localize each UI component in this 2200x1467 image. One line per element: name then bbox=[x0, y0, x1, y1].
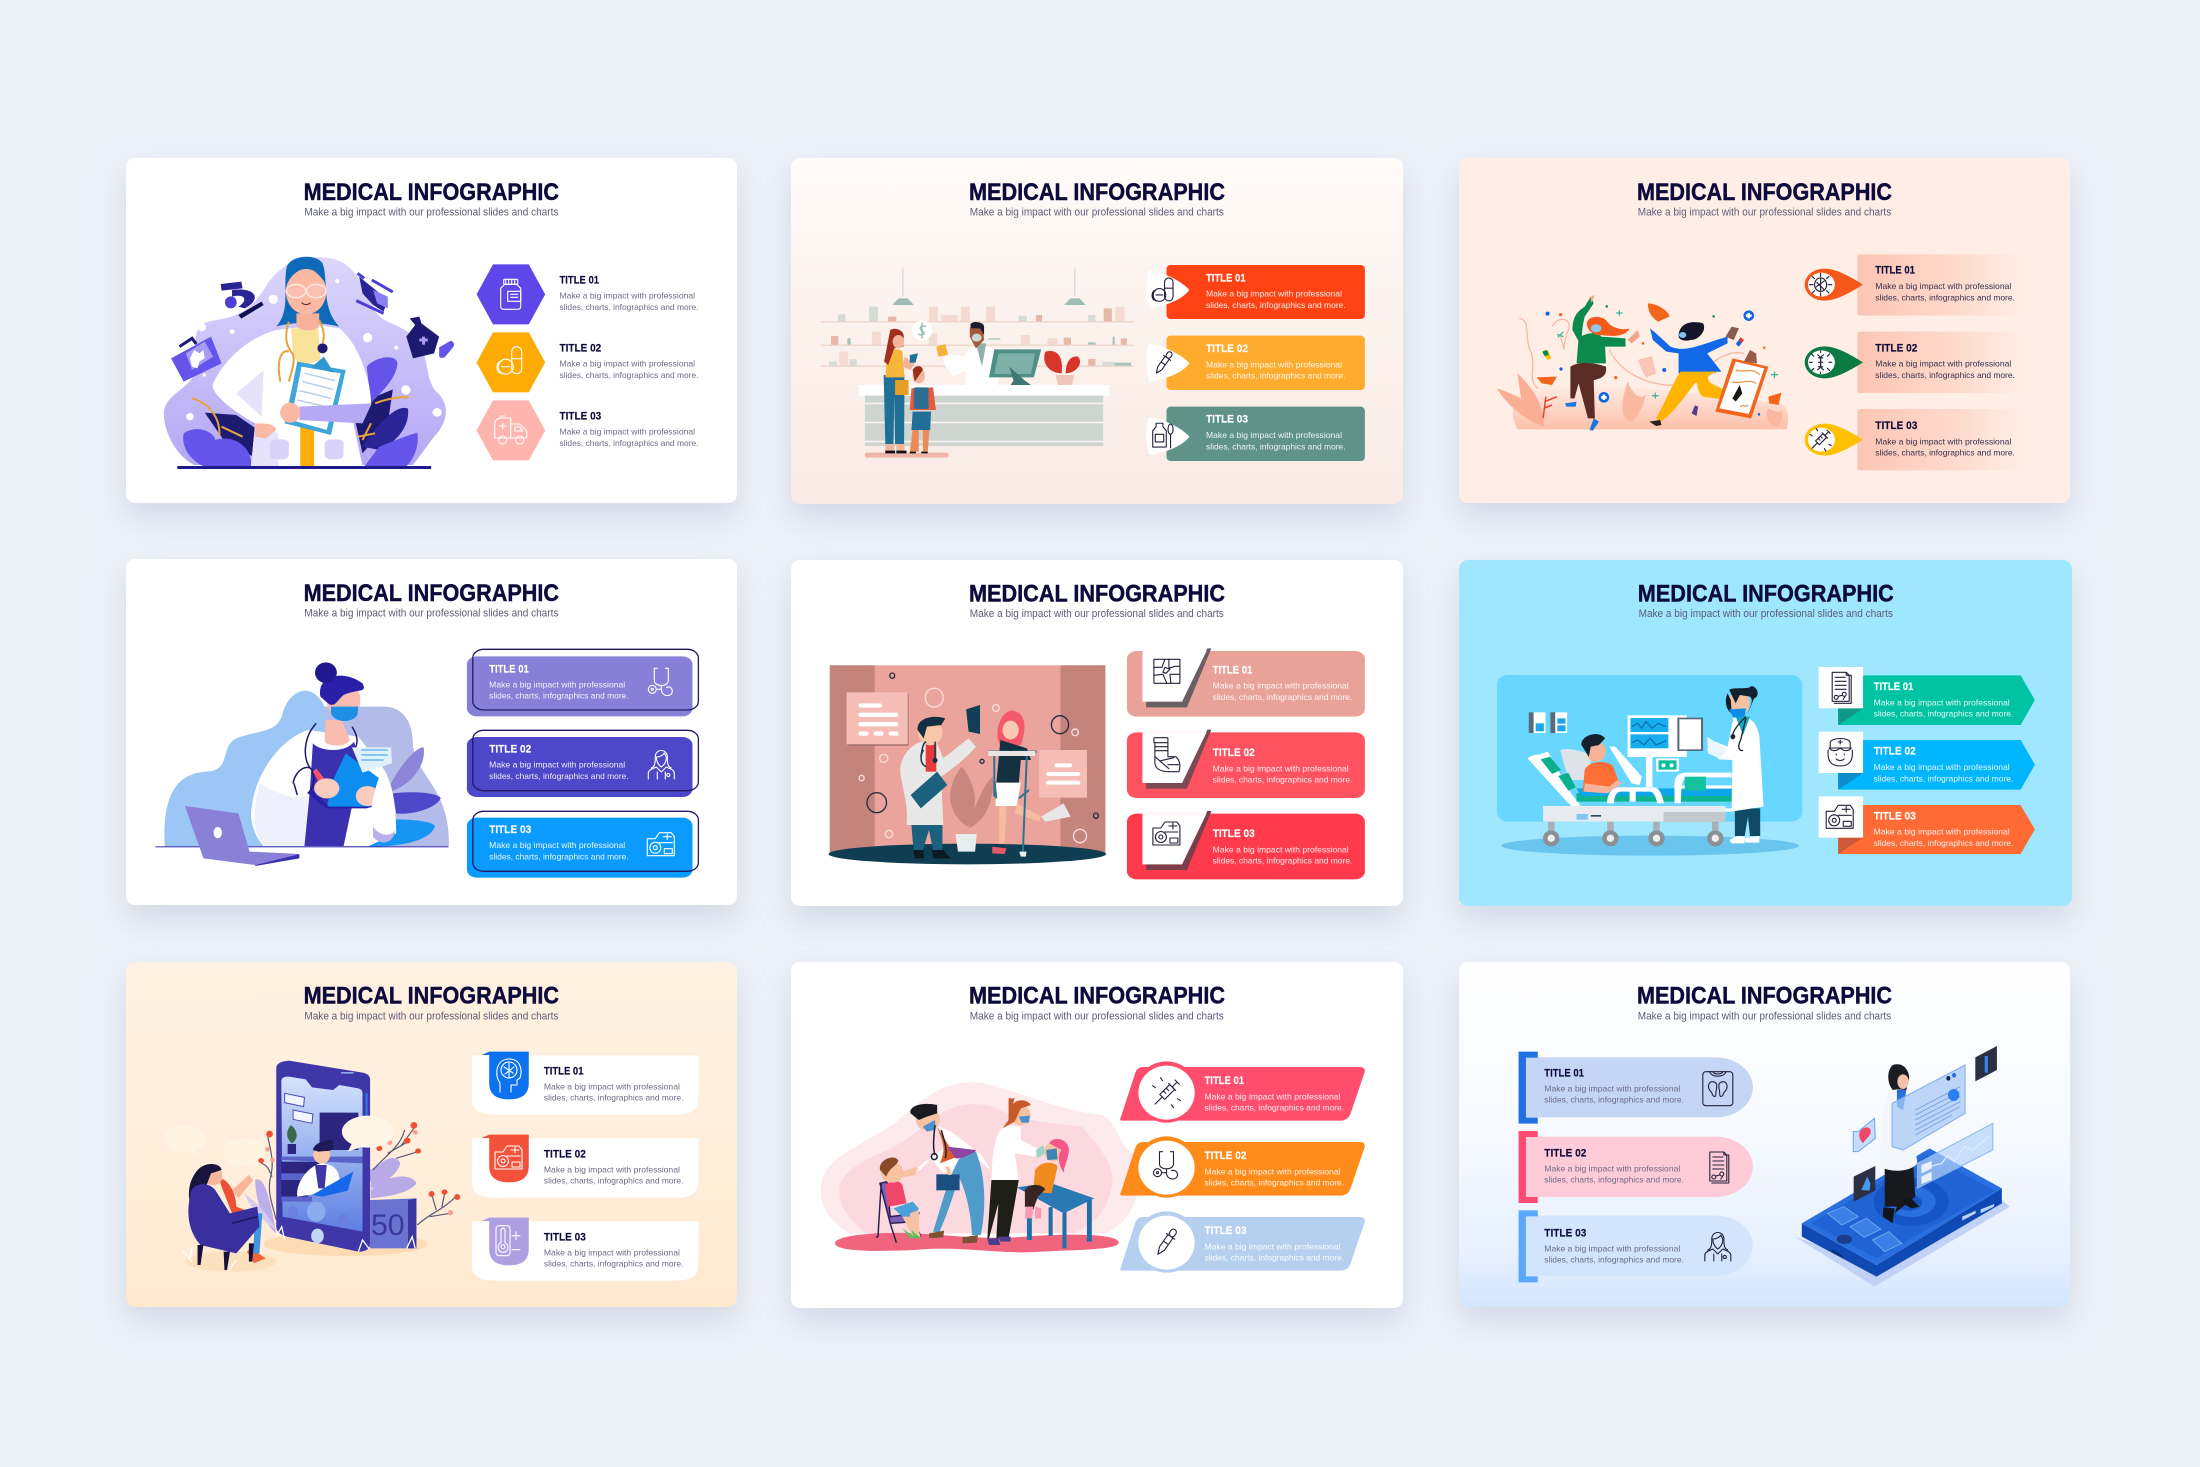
heading: Make a big impact with our professional slides and charts bbox=[304, 206, 559, 218]
illustration: doctors examining children bbox=[821, 1082, 1140, 1252]
card: title 02 bbox=[1519, 1131, 1753, 1203]
text: Make a big impact with professional bbox=[544, 1165, 680, 1174]
hexagon 1 bbox=[477, 264, 545, 324]
icon: foot scale bbox=[1703, 1072, 1733, 1106]
text: Make a big impact with professional bbox=[1206, 431, 1342, 440]
hexagon 2 bbox=[477, 332, 545, 392]
text: slides, charts, infographics and more. bbox=[1206, 442, 1346, 451]
text bbox=[1204, 1075, 1344, 1113]
panel: pharmacy counter bbox=[791, 158, 1403, 504]
heading: MEDICAL INFOGRAPHIC bbox=[1638, 581, 1894, 608]
card and pin 2 bbox=[1805, 332, 2030, 393]
text bbox=[1875, 342, 2015, 380]
heading bbox=[1638, 581, 1894, 620]
panel: hospital bed bbox=[1459, 560, 2072, 906]
heading bbox=[304, 179, 559, 218]
heading bbox=[1637, 179, 1892, 218]
text: TITLE 02 bbox=[1204, 1150, 1246, 1162]
text: TITLE 02 bbox=[1874, 746, 1916, 758]
text: Make a big impact with professional bbox=[560, 428, 695, 437]
heading bbox=[1637, 982, 1892, 1022]
text: slides, charts, infographics and more. bbox=[1875, 449, 2015, 458]
card: title 01 bbox=[1127, 648, 1365, 717]
icon: x-ray plate bbox=[1154, 659, 1180, 683]
text: TITLE 03 bbox=[1204, 1225, 1246, 1237]
text: TITLE 01 bbox=[489, 663, 529, 675]
heading: Make a big impact with our professional slides and charts bbox=[1638, 206, 1892, 218]
card shape 3 bbox=[1819, 796, 2035, 854]
text: Make a big impact with professional bbox=[544, 1248, 680, 1257]
card: title 01 bbox=[1519, 1052, 1753, 1124]
text: Make a big impact with professional bbox=[560, 360, 695, 369]
icon: stethoscope bbox=[648, 668, 672, 696]
icon: syringe bbox=[1152, 1078, 1181, 1108]
text: Make a big impact with professional bbox=[1875, 360, 2011, 369]
text: slides, charts, infographics and more. bbox=[1204, 1254, 1344, 1263]
text: slides, charts, infographics and more. bbox=[544, 1260, 683, 1269]
text: slides, charts, infographics and more. bbox=[560, 439, 698, 448]
text: TITLE 01 bbox=[1875, 265, 1915, 277]
text bbox=[1875, 420, 2015, 458]
item: title 02 bbox=[477, 332, 698, 392]
text: Make a big impact with professional bbox=[1213, 845, 1349, 854]
item: title 01 bbox=[477, 264, 698, 324]
icon: bottle and spoon bbox=[1153, 423, 1173, 448]
heading: MEDICAL INFOGRAPHIC bbox=[304, 179, 559, 206]
illustration: two dancing people bbox=[1497, 295, 1788, 431]
heading bbox=[304, 580, 559, 619]
text: Make a big impact with professional bbox=[1213, 682, 1349, 691]
icon: syringe bbox=[1809, 428, 1831, 451]
heading: MEDICAL INFOGRAPHIC bbox=[304, 982, 559, 1009]
text bbox=[489, 663, 629, 701]
text: Make a big impact with professional bbox=[1206, 360, 1342, 369]
text bbox=[560, 343, 698, 380]
text: TITLE 02 bbox=[489, 744, 531, 756]
text bbox=[1544, 1067, 1684, 1105]
card: title 01 bbox=[1120, 1061, 1365, 1123]
icon: dropper bbox=[1154, 1227, 1179, 1257]
heading: MEDICAL INFOGRAPHIC bbox=[1637, 982, 1892, 1009]
heading: Make a big impact with our professional slides and charts bbox=[970, 206, 1224, 218]
icon: DNA bbox=[1809, 351, 1832, 374]
icon: x-ray camera bbox=[495, 1146, 522, 1169]
text: TITLE 02 bbox=[560, 343, 601, 355]
card: title 01 bbox=[1819, 667, 2035, 725]
text: TITLE 03 bbox=[1544, 1227, 1586, 1239]
text: TITLE 01 bbox=[544, 1065, 584, 1077]
text bbox=[1874, 746, 2013, 783]
text: TITLE 01 bbox=[1544, 1067, 1584, 1079]
icon: medicine jar bbox=[501, 279, 521, 309]
icon: nurse bbox=[1828, 738, 1852, 766]
illustration: female doctor with medical items bbox=[164, 257, 454, 469]
card shape with outline 1 bbox=[467, 649, 698, 716]
text bbox=[1213, 747, 1352, 785]
card and tag 2 bbox=[472, 1135, 698, 1198]
text: slides, charts, infographics and more. bbox=[1544, 1096, 1684, 1105]
card: title 03 bbox=[1519, 1210, 1753, 1282]
text: TITLE 01 bbox=[1213, 664, 1252, 676]
heading: MEDICAL INFOGRAPHIC bbox=[969, 581, 1225, 608]
illustration: doctor on isometric smartphone bbox=[1795, 1046, 2010, 1287]
card shape 2 bbox=[1819, 732, 2035, 790]
text: Make a big impact with professional bbox=[1204, 1167, 1341, 1176]
icon: x-ray camera bbox=[1826, 805, 1853, 828]
card shape 1 bbox=[1127, 648, 1365, 717]
card: title 02 bbox=[467, 730, 698, 797]
card: title 02 bbox=[1805, 332, 2030, 393]
text: TITLE 02 bbox=[1875, 342, 1917, 354]
card: title 01 bbox=[472, 1052, 698, 1115]
text: TITLE 02 bbox=[1544, 1147, 1586, 1159]
icon: brain bbox=[497, 1059, 521, 1092]
text: TITLE 02 bbox=[1206, 343, 1248, 355]
card: title 03 bbox=[472, 1218, 698, 1281]
text bbox=[1204, 1150, 1344, 1188]
icon: ambulance bbox=[495, 416, 527, 444]
text bbox=[1204, 1225, 1344, 1263]
card: title 03 bbox=[1146, 407, 1365, 461]
text: TITLE 02 bbox=[544, 1148, 586, 1160]
text: Make a big impact with professional bbox=[1544, 1084, 1680, 1093]
text bbox=[544, 1065, 683, 1103]
text: slides, charts, infographics and more. bbox=[560, 371, 698, 380]
heading bbox=[304, 982, 559, 1022]
illustration: video consultation on a phone bbox=[164, 1061, 460, 1272]
card shape 3 bbox=[1120, 1211, 1365, 1273]
text bbox=[560, 275, 698, 312]
text: Make a big impact with professional bbox=[1204, 1242, 1341, 1251]
icon: x-ray camera bbox=[1153, 822, 1180, 845]
heading: Make a big impact with our professional slides and charts bbox=[970, 1010, 1224, 1022]
icon: pills bbox=[497, 347, 522, 374]
text: TITLE 03 bbox=[1206, 414, 1248, 426]
heading bbox=[969, 982, 1225, 1022]
text: slides, charts, infographics and more. bbox=[489, 772, 629, 781]
card: title 02 bbox=[1146, 336, 1365, 390]
text: Make a big impact with professional bbox=[1544, 1164, 1680, 1173]
text bbox=[1206, 343, 1346, 381]
text: slides, charts, infographics and more. bbox=[1874, 710, 2013, 719]
card: title 02 bbox=[1120, 1136, 1365, 1198]
panel: children clinic bbox=[791, 962, 1403, 1308]
heading: Make a big impact with our professional slides and charts bbox=[304, 1010, 559, 1022]
text: Make a big impact with professional bbox=[1204, 1092, 1341, 1101]
card and bracket 1 bbox=[1519, 1052, 1753, 1124]
card: title 02 bbox=[1127, 730, 1365, 798]
text: Make a big impact with professional bbox=[1544, 1244, 1680, 1253]
card: title 03 bbox=[1805, 409, 2030, 470]
illustration: patient in hospital bed with doctor bbox=[1497, 675, 1802, 856]
text: Make a big impact with professional bbox=[1874, 828, 2010, 837]
hexagon 3 bbox=[477, 400, 545, 460]
text: slides, charts, infographics and more. bbox=[1874, 839, 2013, 848]
text bbox=[1213, 828, 1352, 866]
text: slides, charts, infographics and more. bbox=[1875, 371, 2015, 380]
heading: MEDICAL INFOGRAPHIC bbox=[969, 982, 1225, 1009]
text: TITLE 01 bbox=[560, 275, 599, 287]
text: slides, charts, infographics and more. bbox=[489, 852, 629, 861]
illustration: nurse with clipboard and laptop bbox=[155, 662, 449, 866]
card: title 01 bbox=[1146, 265, 1365, 319]
card and pin 3 bbox=[1805, 409, 2030, 470]
text: slides, charts, infographics and more. bbox=[1206, 301, 1346, 310]
text bbox=[1213, 664, 1352, 702]
text bbox=[1874, 681, 2013, 719]
text: Make a big impact with professional bbox=[489, 680, 625, 689]
text: Make a big impact with professional bbox=[1874, 698, 2010, 707]
card: title 03 bbox=[467, 811, 698, 878]
text bbox=[1874, 810, 2013, 848]
text bbox=[1544, 1227, 1684, 1265]
card: title 02 bbox=[1819, 732, 2035, 790]
panel: telemedicine phone bbox=[126, 962, 737, 1307]
card and pin 1 bbox=[1805, 254, 2030, 316]
illustration: pharmacy scene bbox=[821, 268, 1134, 458]
heading: Make a big impact with our professional slides and charts bbox=[304, 607, 559, 619]
heading: Make a big impact with our professional slides and charts bbox=[1638, 1010, 1892, 1022]
text bbox=[544, 1148, 683, 1186]
text: Make a big impact with professional bbox=[544, 1082, 680, 1091]
text: TITLE 01 bbox=[1206, 272, 1246, 284]
panel: doctor with hexagons bbox=[126, 158, 737, 503]
text: Make a big impact with professional bbox=[489, 761, 625, 770]
text: Make a big impact with professional bbox=[560, 292, 695, 301]
icon: dropper bbox=[1153, 350, 1174, 376]
text: TITLE 03 bbox=[1875, 420, 1917, 432]
text bbox=[1544, 1147, 1684, 1185]
icon: x-ray camera bbox=[647, 833, 674, 856]
icon: doctor woman bbox=[1705, 1232, 1731, 1261]
phone number text on box: 50 bbox=[371, 1209, 405, 1242]
text: TITLE 01 bbox=[1874, 681, 1913, 693]
item: title 03 bbox=[477, 400, 698, 460]
card shape 3 bbox=[1146, 407, 1365, 461]
card shape 1 bbox=[1819, 667, 2035, 725]
card shape 3 bbox=[1127, 811, 1365, 879]
text: TITLE 01 bbox=[1204, 1075, 1244, 1087]
card: title 01 bbox=[467, 649, 698, 716]
icon: virus bbox=[1809, 273, 1832, 296]
card and tag 3 bbox=[472, 1218, 698, 1281]
icon: document bbox=[1710, 1152, 1729, 1183]
text: TITLE 03 bbox=[1213, 828, 1255, 840]
text: Make a big impact with professional bbox=[489, 841, 625, 850]
text: slides, charts, infographics and more. bbox=[1544, 1176, 1684, 1185]
text: slides, charts, infographics and more. bbox=[544, 1177, 683, 1186]
card: title 01 bbox=[1805, 254, 2030, 316]
card shape 2 bbox=[1127, 730, 1365, 798]
text: Make a big impact with professional bbox=[1874, 763, 2010, 772]
text: slides, charts, infographics and more. bbox=[1874, 774, 2013, 783]
text bbox=[1206, 272, 1346, 310]
text bbox=[489, 744, 629, 781]
card: title 03 bbox=[1127, 811, 1365, 879]
heading: MEDICAL INFOGRAPHIC bbox=[1637, 179, 1892, 206]
card shape 1 bbox=[1120, 1061, 1365, 1123]
heading bbox=[969, 179, 1225, 218]
heading: Make a big impact with our professional slides and charts bbox=[970, 608, 1224, 620]
text: slides, charts, infographics and more. bbox=[1204, 1179, 1344, 1188]
text: slides, charts, infographics and more. bbox=[560, 303, 698, 312]
heading bbox=[969, 581, 1225, 620]
text: slides, charts, infographics and more. bbox=[1213, 693, 1352, 702]
text: slides, charts, infographics and more. bbox=[1875, 293, 2015, 302]
panel: celebrating patients bbox=[1459, 158, 2070, 503]
text bbox=[1875, 265, 2015, 302]
text: slides, charts, infographics and more. bbox=[544, 1094, 683, 1103]
icon: thermometer bbox=[496, 1226, 520, 1256]
text: TITLE 03 bbox=[560, 411, 601, 423]
text: TITLE 02 bbox=[1213, 747, 1255, 759]
card: title 02 bbox=[472, 1135, 698, 1198]
panel: isometric phone bbox=[1459, 962, 2070, 1307]
text: slides, charts, infographics and more. bbox=[1206, 372, 1346, 381]
text: Make a big impact with professional bbox=[1875, 437, 2011, 446]
card shape 2 bbox=[1146, 336, 1365, 390]
card: title 03 bbox=[1120, 1211, 1365, 1273]
text: slides, charts, infographics and more. bbox=[1213, 857, 1352, 866]
card shape with outline 2 bbox=[467, 730, 698, 797]
icon: document bbox=[1832, 672, 1851, 703]
panel: masked nurse bbox=[126, 559, 737, 905]
icon: leg cast bbox=[1154, 738, 1180, 772]
icon: pills bbox=[1152, 278, 1173, 301]
heading: MEDICAL INFOGRAPHIC bbox=[969, 179, 1225, 206]
text: slides, charts, infographics and more. bbox=[1544, 1256, 1684, 1265]
text bbox=[489, 824, 629, 861]
text bbox=[544, 1231, 683, 1269]
icon: doctor woman bbox=[648, 750, 674, 779]
card and bracket 2 bbox=[1519, 1131, 1753, 1203]
heading: Make a big impact with our professional slides and charts bbox=[1639, 608, 1893, 620]
text: Make a big impact with professional bbox=[1875, 282, 2011, 291]
card and tag 1 bbox=[472, 1052, 698, 1115]
text: TITLE 03 bbox=[544, 1231, 586, 1243]
card shape 2 bbox=[1120, 1136, 1365, 1198]
text: Make a big impact with professional bbox=[1206, 290, 1342, 299]
text: slides, charts, infographics and more. bbox=[1213, 776, 1352, 785]
text bbox=[1206, 414, 1346, 451]
card: title 03 bbox=[1819, 796, 2035, 854]
icon: stethoscope bbox=[1154, 1152, 1178, 1179]
card shape 1 bbox=[1146, 265, 1365, 319]
text: slides, charts, infographics and more. bbox=[489, 692, 629, 701]
panel: x-ray consultation bbox=[791, 560, 1403, 906]
text: TITLE 03 bbox=[489, 824, 531, 836]
text: slides, charts, infographics and more. bbox=[1204, 1104, 1344, 1113]
text: TITLE 03 bbox=[1874, 810, 1916, 822]
text: Make a big impact with professional bbox=[1213, 764, 1349, 773]
text bbox=[560, 411, 698, 448]
illustration: doctor and patient with crutches bbox=[829, 665, 1106, 864]
card shape with outline 3 bbox=[467, 811, 698, 878]
card and bracket 3 bbox=[1519, 1210, 1753, 1282]
heading: MEDICAL INFOGRAPHIC bbox=[304, 580, 559, 607]
